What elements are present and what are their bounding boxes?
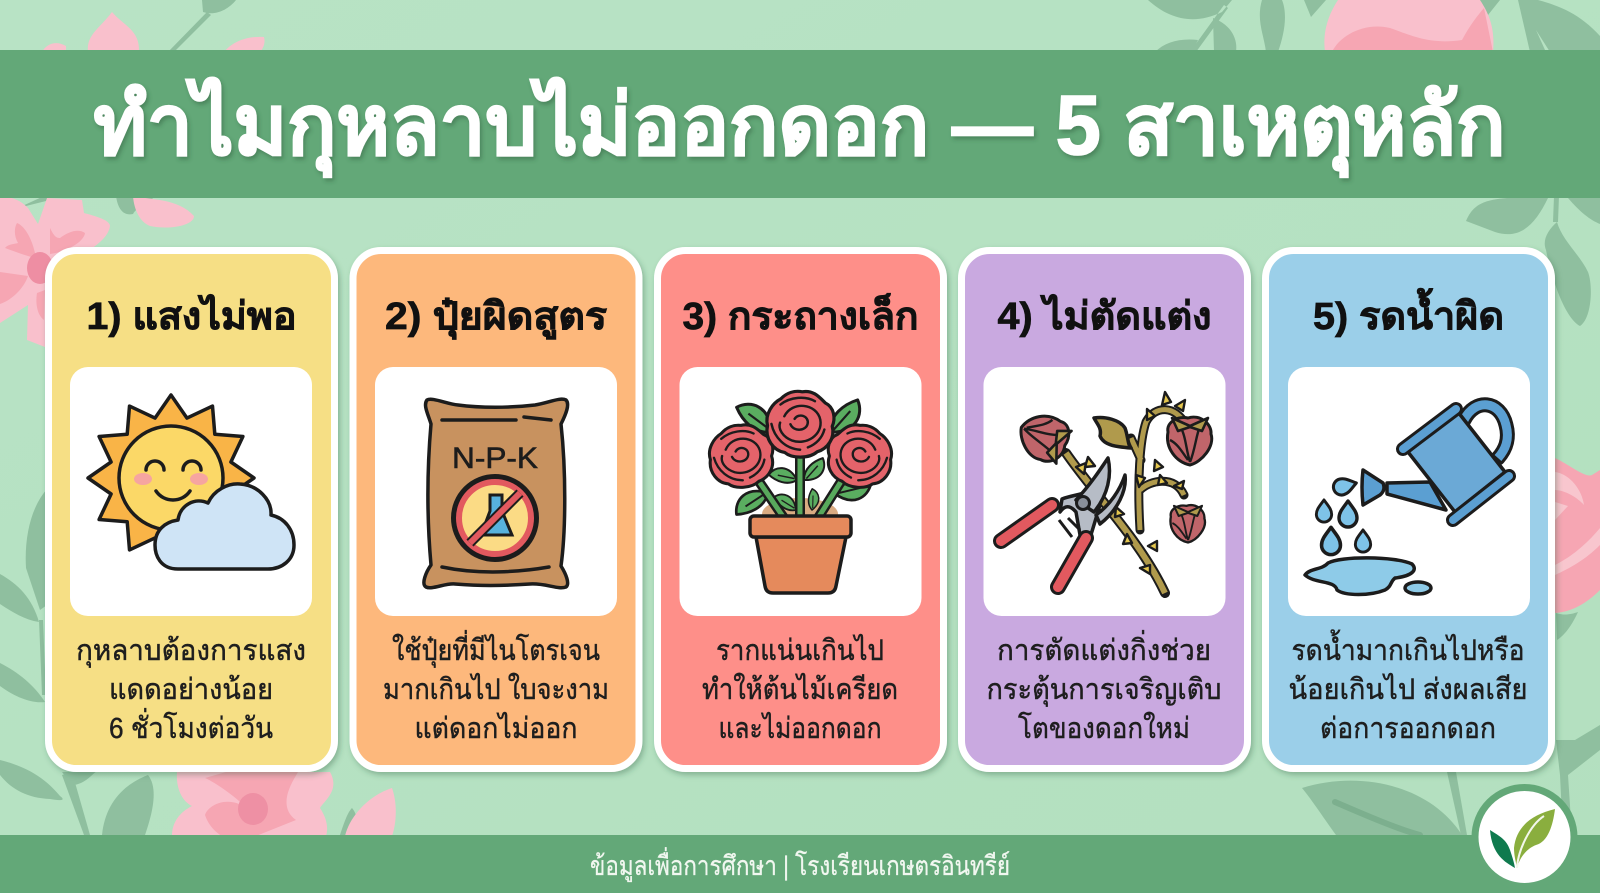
heading 4: 4) ไม่ตัดแต่ง bbox=[998, 294, 1212, 338]
description 5: ต่อการออกดอก bbox=[1320, 713, 1496, 745]
description 4: กระตุ้นการเจริญเติบ bbox=[986, 674, 1222, 707]
icon: fertilizer bag: N-P-K bbox=[452, 442, 538, 475]
description 1: 6 ชั่วโมงต่อวัน bbox=[109, 708, 273, 745]
description 4 bbox=[986, 630, 1222, 745]
icon: roses in small pot bbox=[709, 389, 892, 593]
icon box 2 bbox=[375, 367, 617, 616]
description 3: ทำให้ต้นไม้เครียด bbox=[702, 672, 898, 706]
panel: cause 5 wrong watering bbox=[1266, 250, 1552, 768]
description 5: รดน้ำมากเกินไปหรือ bbox=[1292, 629, 1524, 667]
description 2: มากเกินไป ใบจะงาม bbox=[383, 672, 609, 706]
heading 3: 3) กระถางเล็ก bbox=[682, 293, 918, 338]
heading 1: 1) แสงไม่พอ bbox=[86, 294, 296, 338]
panel: cause 1 low light bbox=[48, 250, 334, 768]
icon: pruning shears and wilted rose stems bbox=[1001, 392, 1212, 593]
icon: watering can and puddle bbox=[1305, 405, 1509, 594]
logo badge bbox=[1475, 788, 1574, 886]
heading 2: 2) ปุ๋ยผิดสูตร bbox=[385, 296, 608, 340]
footer text: ข้อมูลเพื่อการศึกษา | โรงเรียนเกษตรอินทรีย์ bbox=[590, 847, 1010, 882]
description 1 bbox=[76, 635, 306, 745]
icon box 3 bbox=[680, 367, 922, 616]
icon box 4 bbox=[984, 367, 1226, 616]
description 3 bbox=[702, 633, 898, 745]
description 3: รากแน่นเกินไป bbox=[716, 633, 884, 667]
description 1: แดดอย่างน้อย bbox=[109, 674, 273, 706]
heading 5: 5) รดน้ำผิด bbox=[1313, 288, 1504, 338]
icon: fertilizer bag bbox=[424, 399, 568, 588]
panel: cause 2 wrong fertilizer bbox=[353, 250, 639, 768]
title banner bbox=[0, 50, 1600, 198]
icon box 1 bbox=[70, 367, 312, 616]
icon: sun behind cloud bbox=[88, 395, 294, 569]
icon box 5 bbox=[1288, 367, 1530, 616]
description 4: การตัดแต่งกิ่งช่วย bbox=[997, 630, 1211, 667]
description 1: กุหลาบต้องการแสง bbox=[76, 635, 306, 668]
description 2: แต่ดอกไม่ออก bbox=[414, 711, 578, 745]
footer bar bbox=[0, 835, 1600, 893]
description 2 bbox=[383, 630, 609, 745]
description 5: น้อยเกินไป ส่งผลเสีย bbox=[1288, 672, 1528, 706]
description 2: ใช้ปุ๋ยที่มีไนโตรเจน bbox=[392, 630, 600, 668]
description 5 bbox=[1288, 629, 1528, 745]
title: ทำไมกุหลาบไม่ออกดอก — 5 สาเหตุหลัก bbox=[94, 77, 1506, 178]
description 3: และไม่ออกดอก bbox=[718, 711, 882, 745]
panel: cause 4 no pruning bbox=[962, 250, 1248, 768]
panel: cause 3 small pot bbox=[658, 250, 944, 768]
description 4: โตของดอกใหม่ bbox=[1018, 711, 1190, 745]
